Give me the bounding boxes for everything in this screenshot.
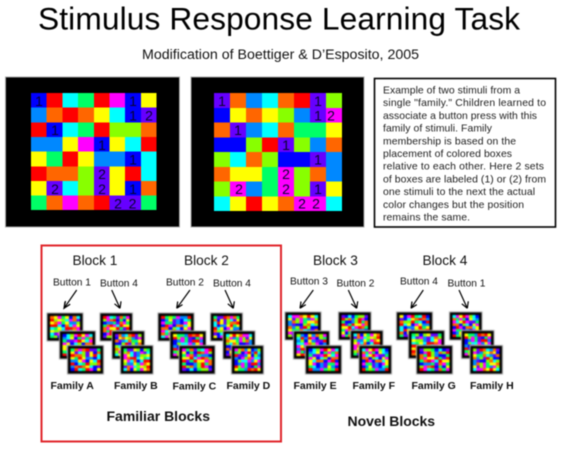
family labels A to D: Family B — [114, 380, 158, 392]
stimulus example 1: 2 — [145, 108, 153, 124]
subtitle: Modification of Boettiger & D’Esposito, 2005 — [142, 47, 419, 63]
button labels: Button 4 — [213, 278, 251, 290]
stimulus example 2: 2 — [312, 196, 320, 212]
family labels A to D — [50, 380, 271, 392]
family labels E to H: Family G — [412, 380, 456, 392]
stimulus example 1: 2 — [98, 181, 106, 197]
family labels A to D: Family D — [226, 380, 271, 392]
button labels: Button 1 — [53, 278, 91, 288]
block labels 1 and 2: Block 2 — [184, 253, 229, 268]
stimulus example 1: 1 — [35, 93, 43, 109]
stimulus example 1: 2 — [51, 181, 59, 197]
explanation text box: associate a button press with this — [383, 111, 537, 122]
stimulus example 2: 2 — [282, 166, 290, 182]
arrows from buttons to families — [64, 290, 234, 308]
stimulus stack: family F — [338, 312, 392, 374]
explanation text box: Example of two stimuli from a — [383, 86, 520, 96]
stimulus stack: family E — [285, 312, 342, 374]
stimulus stack: family C — [158, 313, 215, 374]
button labels: Button 4 — [100, 278, 138, 290]
block labels 3 and 4 — [313, 253, 468, 268]
stimulus example 2: 1 — [234, 122, 242, 138]
explanation text box: color changes but the position — [383, 200, 524, 211]
stimulus example 2: 1 — [218, 93, 226, 109]
stimulus example 2: 1 — [314, 93, 322, 109]
explanation text box: of boxes are labeled (1) or (2) from — [383, 174, 546, 185]
button labels: Button 3 — [290, 276, 328, 288]
family labels E to H: Family H — [470, 380, 514, 392]
explanation text box: single "family." Children learned to — [383, 98, 546, 109]
button labels: Button 4 — [400, 276, 438, 288]
stimulus example 2: 1 — [282, 137, 290, 153]
title: Stimulus Response Learning Task — [38, 0, 520, 36]
family labels E to H: Family F — [352, 380, 396, 392]
stimulus example 1: 1 — [129, 93, 137, 109]
stimulus example 1 — [6, 77, 180, 227]
stimulus example 1: 2 — [129, 196, 137, 212]
block labels 3 and 4: Block 3 — [313, 253, 358, 268]
stimulus example 1: 1 — [129, 108, 137, 124]
family labels E to H: Family E — [294, 380, 337, 392]
explanation text box: one stimuli to the next the actual — [383, 187, 535, 198]
family labels A to D: Family C — [172, 380, 217, 392]
arrows from buttons to families — [300, 290, 468, 308]
block labels 1 and 2 — [72, 253, 229, 268]
stimulus example 1: 1 — [129, 152, 137, 168]
explanation text box: membership is based on the — [383, 136, 516, 147]
novel blocks heading: Novel Blocks — [348, 413, 435, 429]
stimulus example 1: 1 — [51, 122, 59, 138]
stimulus example 2: 1 — [314, 152, 322, 168]
explanation text box — [374, 78, 556, 227]
block labels 3 and 4: Block 4 — [422, 253, 468, 268]
stimulus stack: family D — [210, 313, 264, 374]
stimulus example 1: 1 — [98, 137, 106, 153]
block labels 1 and 2: Block 1 — [72, 253, 117, 268]
button labels — [53, 278, 251, 290]
red frame — [42, 246, 281, 442]
stimulus example 1: 1 — [129, 181, 137, 197]
explanation text box: remains the same. — [383, 212, 470, 224]
stimulus example 2: 1 — [314, 181, 322, 197]
explanation text box: relative to each other. Here 2 sets — [383, 162, 544, 173]
stimulus example 2: 2 — [235, 181, 243, 197]
stimulus example 2: 1 — [314, 108, 322, 124]
stimulus example 2: 2 — [327, 108, 335, 124]
stimulus example 2: 2 — [282, 181, 290, 197]
button labels: Button 2 — [166, 278, 204, 288]
family labels E to H — [294, 380, 514, 392]
explanation text box: family of stimuli. Family — [383, 124, 493, 135]
button labels — [290, 276, 486, 290]
stimulus example 1: 2 — [114, 196, 122, 212]
panel: familiar blocks — [42, 246, 281, 442]
panel: novel blocks — [285, 253, 514, 429]
button labels: Button 1 — [448, 278, 486, 290]
family labels A to D: Family A — [50, 380, 94, 392]
stimulus stack: family G — [396, 312, 452, 374]
stimulus stack: family H — [450, 312, 502, 374]
explanation text box: placement of colored boxes — [383, 149, 512, 160]
stimulus example 2: 2 — [298, 196, 306, 212]
stimulus stack: family A — [47, 313, 104, 374]
button labels: Button 2 — [336, 278, 375, 290]
stimulus example 1: 2 — [98, 166, 106, 182]
stimulus stack: family B — [100, 313, 153, 374]
familiar blocks heading: Familiar Blocks — [106, 408, 210, 424]
stimulus example 2 — [191, 77, 364, 227]
